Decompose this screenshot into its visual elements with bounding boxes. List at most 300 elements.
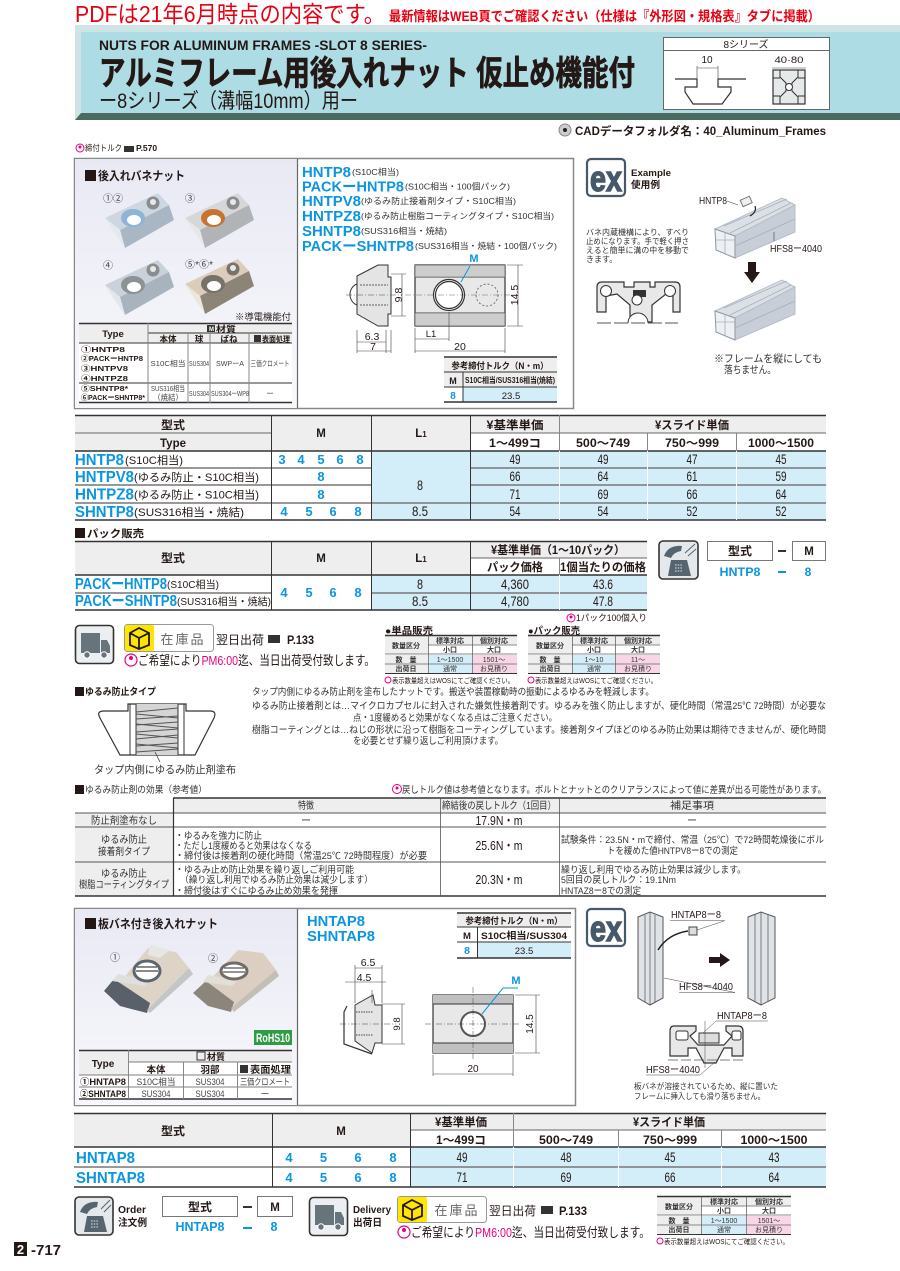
price table: nuts — [75, 415, 826, 521]
order example: HNTAP8 — [176, 1220, 225, 1234]
price table: leaf spring nuts: 型式 — [161, 1124, 186, 1138]
price table: leaf spring nuts — [74, 1113, 826, 1187]
photo: nut 1: ① — [110, 952, 120, 964]
label: HNTAP8ー8 — [671, 910, 721, 921]
header labels: M — [316, 428, 326, 440]
effect table: 試験条件：23.5N・mで締付、常温（25℃）で72時間乾燥後にボル — [561, 834, 824, 846]
type names: (ゆるみ防止・S10C相当) — [134, 488, 259, 502]
header band — [75, 25, 900, 120]
quantity table: single: 出荷日 — [396, 664, 416, 673]
M values: 6 — [336, 452, 344, 467]
panel: spring nuts — [74, 158, 574, 408]
arrow: right — [709, 953, 730, 967]
next-day shipping: 翌日出荷 — [216, 633, 264, 647]
product names: HNTAP8 — [307, 913, 365, 930]
price table: pack: (S10C相当) — [167, 578, 219, 591]
quantity table: bottom: 大口 — [762, 1206, 776, 1215]
M values: 3 — [278, 452, 286, 467]
heading: pack sales — [75, 527, 145, 540]
notice line — [75, 1, 820, 27]
quantity table: bottom: 1501〜 — [758, 1218, 780, 1225]
price table: leaf spring nuts: 64 — [768, 1170, 780, 1185]
torque table: 参考締付トルク（N・m） — [452, 360, 548, 371]
order label: 注文例 — [118, 1216, 147, 1229]
product names list: (S10C相当) — [352, 167, 399, 177]
quantity table: single: 数量区分 — [392, 641, 420, 650]
price table: leaf spring nuts: ¥基準単価 — [435, 1115, 487, 1129]
price table: leaf spring nuts: 43 — [768, 1150, 780, 1165]
description text: を必要とせず繰り返しご利用頂けます。 — [353, 735, 503, 747]
type names — [75, 452, 259, 521]
header labels: 750〜999 — [665, 438, 719, 450]
example description: きます。 — [586, 255, 617, 264]
L1 and prices: 64 — [776, 487, 787, 502]
arrow: down — [744, 262, 760, 283]
quantity table: pack: 数量区分 — [536, 641, 564, 650]
product names list: (SUS316相当・焼結) — [361, 226, 447, 236]
quantity table: pack: 標準対応 — [580, 636, 608, 645]
torque reference note: 締付トルク — [85, 143, 122, 153]
quantity table: bottom: 通常 — [717, 1225, 731, 1234]
price table: pack: 4,780 — [501, 594, 529, 609]
quantity table: bottom: 標準対応 — [710, 1197, 738, 1206]
diagram: frame after insertion — [715, 280, 795, 340]
material table: S10C相当 — [136, 1076, 176, 1087]
order example: 型式 — [188, 1200, 213, 1214]
CAD folder note: CADデータフォルダ名：40_Aluminum_Frames — [575, 124, 826, 138]
example description: バネ内蔵機構により、すべり — [586, 227, 689, 237]
material table: 表面処理 — [250, 1064, 292, 1076]
page number: 2 — [17, 1242, 24, 1257]
label: HNTAP8ー8 — [717, 1011, 767, 1022]
M values: 5 — [305, 504, 313, 519]
next-day shipping — [216, 633, 314, 647]
type names: HNTPV8 — [75, 469, 134, 486]
torque caution note: 戻しトルク値は参考値となります。ボルトとナットとのクリアランスによって値に差異が出る可能性があります。 — [402, 784, 826, 796]
pack quantity note: 1パック100個入り — [576, 612, 647, 623]
quantity table: bottom: 個別対応 — [755, 1197, 783, 1206]
same-day shipping note: ご希望によりPM6:00迄、当日出荷受付致します。 — [411, 1225, 650, 1240]
example description: 止めになります。手で軽く押さ — [586, 236, 689, 246]
M values: 8 — [356, 452, 364, 467]
icon: example: ex — [590, 158, 622, 199]
heading: anti-loosening type: ゆるみ防止タイプ — [85, 686, 156, 698]
drawing: front view: 20 — [454, 341, 466, 353]
L1 and prices: 71 — [510, 487, 520, 502]
description text: タップ内側にゆるみ防止剤を塗布したナットです。搬送や装置稼動時の振動によるゆるみを軽減します。 — [252, 686, 654, 698]
effect table: ー — [687, 816, 697, 827]
drawing: front view: M — [511, 975, 521, 987]
order example: M — [804, 546, 814, 558]
header labels: 1000〜1500 — [748, 438, 814, 450]
material table: 本体 — [146, 1064, 166, 1076]
header labels: 型式 — [161, 418, 186, 432]
series box: 8シリーズ — [724, 38, 768, 51]
example label: Example — [631, 168, 671, 179]
price table: pack: 8 — [354, 585, 362, 600]
icon: truck — [76, 626, 114, 664]
diagram: vertical frame after — [748, 912, 775, 1005]
quantity table: pack: 1〜10 — [585, 657, 603, 664]
series box: 10 — [701, 55, 713, 66]
material table: SUS304 — [196, 1089, 224, 1099]
price table: leaf spring nuts: 6 — [354, 1150, 362, 1165]
icon: example 2: ex — [590, 908, 622, 949]
product names list: (S10C相当・100個パック) — [405, 182, 510, 192]
material table: ⑤SHNTP8* — [81, 384, 128, 393]
order example: 型式 — [728, 544, 753, 558]
price table: pack: パック価格 — [487, 560, 543, 574]
type names: SHNTP8 — [75, 504, 134, 521]
photo: nut 1 2: ①② — [103, 193, 123, 205]
price table: leaf spring nuts: 69 — [560, 1170, 572, 1185]
conductive note: ※導電機能付 — [235, 311, 291, 322]
drawing caption: タップ内側にゆるみ防止剤塗布 — [94, 763, 236, 776]
type names: (S10C相当) — [125, 453, 183, 467]
label: HFS8ー4040 — [646, 1065, 700, 1076]
order example: HNTP8 — [720, 565, 761, 579]
L1 and prices: 52 — [686, 504, 698, 519]
quantity table: bottom: 1〜1500 — [711, 1218, 737, 1225]
price table: pack: 43.6 — [593, 577, 613, 592]
quantity table: pack: 大口 — [631, 645, 645, 654]
effect table: 防止剤塗布なし — [91, 814, 157, 827]
L1 and prices: 8 — [417, 478, 423, 493]
price table: pack: 8 — [417, 577, 423, 592]
quantity table: single: 1〜1500 — [437, 657, 463, 664]
price table: pack: M — [316, 553, 326, 565]
example note: 板バネが溶接されているため、縦に置いた — [634, 1081, 778, 1091]
effect table: ・締付後はすぐにゆるみ止め効果を発揮 — [175, 885, 338, 897]
material table: ②SHNTAP8 — [80, 1089, 126, 1099]
material table: 表面処理 — [262, 334, 290, 344]
order label — [118, 1205, 147, 1229]
material table: 材質 — [216, 324, 237, 334]
product names list: PACKーSHNTP8 — [302, 238, 414, 255]
quantity table: bottom: お見積り — [755, 1225, 783, 1234]
quantity table: single: 個別対応 — [480, 636, 508, 645]
material table: SUS304ーWP8 — [211, 389, 249, 398]
product names — [307, 913, 375, 945]
material table: S10C相当 — [150, 358, 186, 368]
effect table: ・ゆるみ止め防止効果を繰り返しご利用可能 — [175, 864, 354, 876]
drawing: front view — [405, 253, 523, 353]
quantity table: pack: 通常 — [587, 664, 601, 673]
drawing: frame section — [597, 282, 680, 323]
M values: 5 — [317, 452, 325, 467]
main title: アルミフレーム用後入れナット 仮止め機能付 — [99, 55, 635, 93]
price table: pack: (SUS316相当・焼結) — [177, 595, 271, 608]
label: HFS8ー4040 — [770, 244, 822, 255]
next-day shipping: 翌日出荷 — [489, 1204, 536, 1218]
stock badge — [398, 1196, 486, 1222]
material table: M — [209, 327, 214, 333]
effect table: ・ただし1度緩めると効果はなくなる — [175, 840, 312, 852]
panel heading: 後入れバネナット — [98, 168, 185, 183]
product names: SHNTAP8 — [307, 928, 375, 945]
drawing: front view: 14.5 — [525, 1014, 536, 1034]
photo: nut 4: ④ — [103, 260, 113, 272]
drawing: front view — [425, 975, 540, 1076]
price table: leaf spring nuts: 45 — [664, 1150, 676, 1165]
next-day shipping: P.133 — [559, 1204, 587, 1218]
delivery label: Delivery — [353, 1205, 391, 1216]
quantity table: single: 表示数量超えはWOSにてご確認ください。 — [392, 676, 514, 685]
M values: 8 — [354, 504, 362, 519]
price table: pack: 4 — [280, 585, 288, 600]
frame note: ※フレームを縦にしても — [714, 352, 822, 365]
header labels: ¥スライド単価 — [655, 418, 729, 432]
quantity table: bottom: 表示数量超えはWOSにてご確認ください。 — [664, 1237, 789, 1246]
material table: ー — [260, 1089, 270, 1099]
price table: leaf spring nuts: 1000〜1500 — [740, 1135, 808, 1147]
material table: ④HNTPZ8 — [81, 374, 128, 383]
L1 and prices: 47 — [686, 452, 698, 467]
photo: nut 5 6 — [185, 259, 254, 314]
material table: 本体 — [159, 334, 177, 344]
product names list: HNTP8 — [302, 164, 351, 181]
material table: ①HNTP8 — [81, 345, 125, 354]
L1 and prices: 45 — [776, 452, 786, 467]
product names list: (SUS316相当・焼結・100個パック) — [415, 241, 557, 251]
order example — [708, 542, 826, 579]
notice line: PDFは21年6月時点の内容です。 — [75, 1, 385, 27]
effect table: 20.3N・m — [476, 872, 522, 887]
price table: pack: 8.5 — [412, 594, 428, 609]
quantity table: pack: ●パック販売 — [528, 625, 580, 637]
series box — [664, 38, 830, 110]
quantity table: pack: 数 量 — [540, 655, 560, 664]
quantity table: single: 小口 — [443, 645, 457, 654]
price table: leaf spring nuts: 4 — [285, 1150, 293, 1165]
price table: leaf spring nuts: 4 — [285, 1170, 293, 1185]
example note — [634, 1081, 778, 1101]
header labels: 500〜749 — [576, 438, 630, 450]
price table: leaf spring nuts: 750〜999 — [643, 1135, 697, 1147]
effect table: 17.9N・m — [476, 813, 522, 828]
price table: leaf spring nuts: 48 — [560, 1150, 572, 1165]
effect table: 繰り返し利用でゆるみ防止効果は減少します。 — [561, 864, 746, 876]
price table: leaf spring nuts: 500〜749 — [539, 1135, 593, 1147]
frame note: 落ちません。 — [724, 364, 776, 376]
price table: pack: 6 — [329, 585, 337, 600]
L1 and prices: 59 — [776, 469, 786, 484]
M values: 4 — [280, 504, 288, 519]
drawing: front view: M — [469, 253, 479, 265]
series subtitle: ー8シリーズ（溝幅10mm）用ー — [99, 90, 358, 113]
effect table: 特徴 — [298, 799, 314, 812]
material table: Type — [102, 329, 124, 340]
quantity table: single: 数 量 — [396, 655, 416, 664]
material table: ②PACKーHNTP8 — [81, 354, 143, 363]
drawing: front view: L1 — [426, 329, 436, 340]
description text: ゆるみ防止接着剤とは…マイクロカプセルに封入された嫌気性接着剤です。ゆるみを強く防止しますが、硬化時間（常温25℃ 72時間）が必要な — [252, 700, 826, 712]
drawing: side view — [346, 265, 406, 353]
drawing: side view: 9.8 — [392, 1017, 403, 1031]
order example: 8 — [805, 565, 812, 579]
panel: leaf spring nuts — [74, 908, 576, 1106]
material table: SUS316相当 — [151, 383, 185, 393]
material table — [79, 1050, 292, 1099]
material table: ⑥PACKーSHNTP8* — [81, 393, 145, 402]
L1 and prices: 66 — [686, 487, 698, 502]
photo: nut 3: ③ — [185, 193, 195, 205]
torque table: M — [463, 931, 471, 942]
header labels — [160, 418, 814, 450]
photo: nut 4 — [103, 260, 174, 315]
drawing: side view — [340, 957, 405, 1054]
quantity table: pack: 表示数量超えはWOSにてご確認ください。 — [535, 676, 657, 685]
drawing: frame section 2 — [646, 1011, 768, 1076]
drawing: front view: 14.5 — [509, 285, 521, 305]
notice line: 最新情報はWEB頁でご確認ください（仕様は『外形図・規格表』タブに掲載） — [389, 8, 820, 24]
effect table: 樹脂コーティングタイプ — [79, 878, 169, 891]
header labels: L1 — [415, 428, 427, 440]
product names list: (ゆるみ防止接着剤タイプ・S10C相当) — [361, 196, 516, 206]
material table: SUS304 — [196, 1077, 224, 1087]
price table: pack: 47.8 — [593, 594, 613, 609]
quantity table: pack: 出荷日 — [540, 664, 560, 673]
price table: leaf spring nuts: 71 — [456, 1170, 468, 1185]
material table: （焼結） — [153, 392, 183, 402]
quantity table: single: 1501〜 — [483, 657, 505, 664]
torque table: S10C相当/SUS316相当(焼結) — [465, 375, 555, 385]
photo: nut 2 — [193, 950, 279, 1012]
material table: SWPーA — [216, 359, 244, 368]
same-day shipping note: ご希望によりPM6:00迄、当日出荷受付致します。 — [138, 653, 375, 668]
example note: フレームに挿入しても滑り落ちません。 — [634, 1091, 765, 1101]
stock badge — [124, 624, 214, 652]
M values: 6 — [329, 504, 337, 519]
torque table: 参考締付トルク（N・m） — [466, 915, 562, 926]
label: HFS8ー4040 — [679, 982, 733, 993]
material table: ③HNTPV8 — [81, 364, 128, 373]
quantity table: single: 標準対応 — [436, 636, 464, 645]
price table: pack: ¥基準単価（1〜10パック） — [491, 543, 625, 557]
torque reference note — [76, 143, 157, 153]
L1 and prices: 49 — [510, 452, 520, 467]
material table — [79, 323, 292, 403]
material table: 羽部 — [200, 1064, 220, 1076]
frame note — [714, 352, 822, 376]
effect table: 5回目の戻しトルク：19.1Nm — [561, 875, 676, 886]
M values: 4 — [297, 452, 305, 467]
header labels: 1〜499コ — [489, 438, 541, 450]
price table: leaf spring nuts: 1〜499コ — [436, 1135, 486, 1147]
price table: leaf spring nuts: 66 — [664, 1170, 676, 1185]
price table: leaf spring nuts: 8 — [389, 1170, 397, 1185]
price table: leaf spring nuts: M — [336, 1126, 346, 1138]
effect table: ・締付後は接着剤の硬化時間（常温25℃ 72時間程度）が必要 — [175, 850, 427, 862]
drawing: side view: 7 — [370, 341, 376, 353]
quantity table: pack: お見積り — [624, 664, 652, 673]
stock badge: 在庫品 — [160, 632, 204, 647]
drawing: side view: 9.8 — [393, 288, 405, 302]
price table: leaf spring nuts: 5 — [320, 1170, 327, 1185]
torque table: 23.5 — [515, 946, 533, 957]
english subtitle: NUTS FOR ALUMINUM FRAMES -SLOT 8 SERIES- — [99, 38, 427, 53]
price table: leaf spring nuts: 5 — [320, 1150, 327, 1165]
quantity table: single — [385, 625, 517, 685]
price table: pack: PACKーHNTP8 — [75, 576, 167, 593]
L1 and prices: 66 — [510, 469, 520, 484]
diagram: frame with nut — [699, 196, 822, 258]
L1 and prices: 69 — [598, 487, 608, 502]
header labels: Type — [160, 438, 186, 450]
product names list: SHNTP8 — [302, 223, 361, 240]
icon: delivery truck — [310, 1198, 348, 1236]
quantity table: bottom: 小口 — [717, 1206, 731, 1215]
product names list: HNTPV8 — [302, 193, 361, 210]
example description — [586, 227, 689, 264]
description text — [252, 686, 826, 747]
effect table: ゆるみ防止 — [101, 867, 147, 880]
heading: effect table: ゆるみ防止剤の効果（参考値） — [85, 784, 207, 796]
quantity table: bottom: 数量区分 — [665, 1202, 693, 1211]
type names: HNTPZ8 — [75, 486, 134, 504]
price table: leaf spring nuts: SHNTAP8 — [76, 1170, 145, 1187]
L1 and prices: 54 — [598, 504, 609, 519]
quantity table: single: お見積り — [480, 664, 508, 673]
quantity table: single: 大口 — [487, 645, 501, 654]
delivery label — [353, 1205, 391, 1229]
material table: SUS304 — [189, 359, 209, 368]
effect table: ゆるみ防止 — [101, 833, 147, 846]
price table: pack: 4,360 — [501, 577, 529, 592]
quantity table: pack: 11〜 — [631, 657, 645, 664]
price table: pack — [75, 541, 647, 610]
material table: 三価クロメート — [250, 358, 290, 368]
quantity table: bottom — [657, 1196, 791, 1246]
example label — [631, 168, 671, 191]
drawing: side view: 6.3 — [365, 331, 379, 343]
order label: Order — [118, 1205, 146, 1216]
effect table — [75, 798, 826, 897]
label: HNTP8 — [699, 196, 727, 207]
series box: 40·80 — [774, 55, 804, 66]
price table: pack: 型式 — [161, 551, 186, 565]
effect table: （繰り返し利用でゆるみ防止効果は減少します） — [180, 874, 373, 886]
price table: pack: 5 — [305, 585, 313, 600]
icon: telephone order — [75, 1197, 113, 1235]
L1 and prices: 61 — [686, 469, 698, 484]
type names: (ゆるみ防止・S10C相当) — [134, 470, 259, 484]
torque table: 23.5 — [502, 391, 520, 402]
effect table: HNTAZ8ー8での測定 — [561, 885, 641, 897]
quantity table: pack — [528, 625, 660, 685]
material table: 球 — [195, 334, 204, 344]
torque table — [457, 913, 571, 958]
photo: nut 1 2 — [103, 193, 174, 248]
heading: pack sales: パック販売 — [87, 527, 145, 540]
torque reference note: P.570 — [136, 143, 157, 153]
photo: nut 2: ② — [208, 953, 218, 965]
effect table: 25.6N・m — [476, 838, 522, 853]
photo: nut 3 — [185, 193, 254, 248]
effect table: 補足事項 — [670, 799, 714, 812]
price table: leaf spring nuts: 49 — [456, 1150, 468, 1165]
price table: pack: L1 — [415, 553, 427, 565]
drawing: front view: 20 — [467, 1064, 479, 1075]
L1 and prices — [412, 452, 787, 519]
material table: SUS304 — [189, 389, 209, 398]
L1 and prices: 64 — [598, 469, 609, 484]
material table: 三価クロメート — [240, 1076, 290, 1087]
torque table: S10C相当/SUS304 — [481, 930, 568, 942]
example description: えると簡単に溝の中を移動で — [586, 245, 689, 255]
effect table: トを緩めた値HNTPV8ー8での測定 — [607, 845, 738, 857]
torque table: 8 — [464, 945, 470, 957]
